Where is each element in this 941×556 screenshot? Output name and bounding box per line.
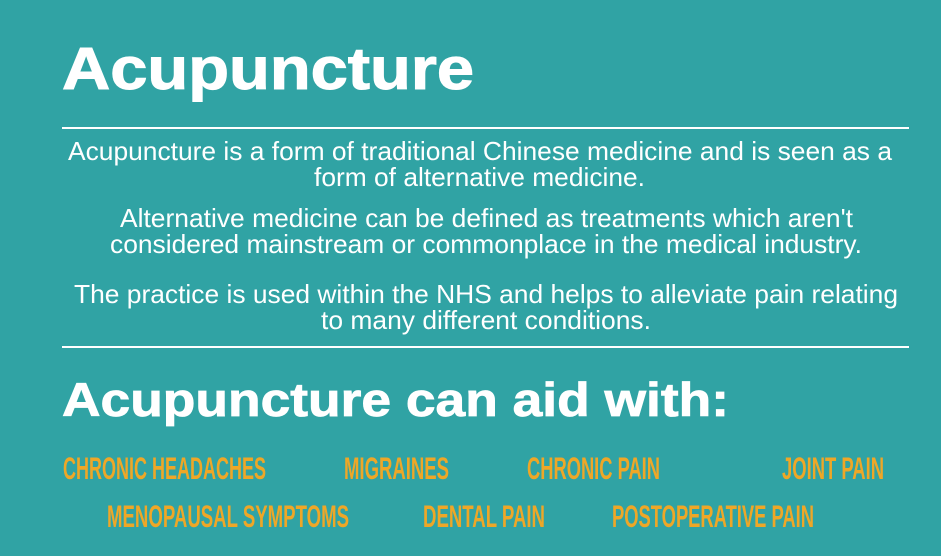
text block: introduction: considered mainstream or commonplace in the medical industry.: [110, 229, 862, 259]
text block: introduction: [68, 136, 898, 335]
text block: introduction: Alternative medicine can be defined as treatments which aren't: [120, 203, 854, 233]
list of conditions: MENOPAUSAL SYMPTOMS: [107, 498, 349, 534]
list of conditions: CHRONIC HEADACHES: [63, 450, 266, 486]
text block: introduction: The practice is used within the NHS and helps to alleviate pain relating: [74, 279, 898, 309]
text block: introduction: to many different conditions.: [321, 305, 651, 335]
list of conditions: DENTAL PAIN: [423, 498, 545, 534]
text block: introduction: Acupuncture is a form of traditional Chinese medicine and is seen as a: [68, 136, 893, 166]
text block: introduction: form of alternative medicine.: [314, 162, 645, 192]
list of conditions: CHRONIC PAIN: [527, 450, 660, 486]
list of conditions: [63, 450, 884, 534]
title: Acupuncture: [62, 36, 474, 102]
heading: conditions: Acupuncture can aid with:: [62, 373, 729, 426]
list of conditions: MIGRAINES: [344, 450, 449, 486]
